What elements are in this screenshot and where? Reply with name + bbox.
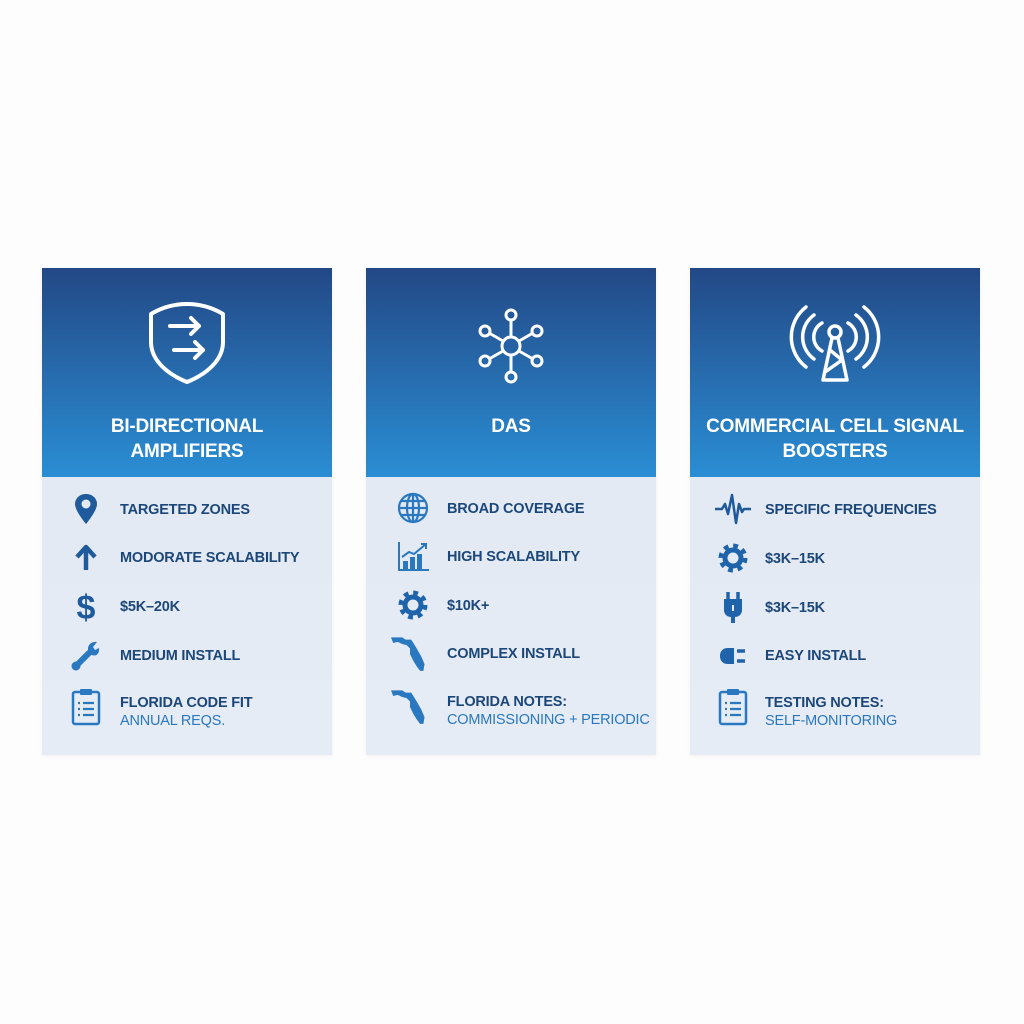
icon: pin xyxy=(75,494,97,524)
row: testing notes: SELF-MONITORING xyxy=(765,713,897,729)
icon: gear xyxy=(718,544,748,572)
row: cost xyxy=(398,590,489,620)
row: high scalability: HIGH SCALABILITY xyxy=(447,549,580,565)
header: DAS xyxy=(366,268,656,477)
row: medium install xyxy=(72,642,240,670)
icon: gear xyxy=(398,590,428,620)
icon: clipboard xyxy=(72,689,100,726)
icon: florida xyxy=(391,637,424,671)
icon: florida xyxy=(391,690,424,724)
row: cost: $10K+ xyxy=(447,598,489,614)
row: cost plug: $3K–15K xyxy=(765,600,825,616)
title xyxy=(706,416,964,462)
row: florida code fit xyxy=(72,689,252,729)
row: moderate scalability: MODORATE SCALABILITY xyxy=(120,550,299,566)
row: florida code fit: ANNUAL REQS. xyxy=(120,713,225,729)
row: targeted zones: TARGETED ZONES xyxy=(120,502,250,518)
card: commercial cell signal boosters xyxy=(690,268,980,755)
row: moderate scalability xyxy=(75,544,300,570)
row: complex install: COMPLEX INSTALL xyxy=(447,646,580,662)
row: easy install xyxy=(720,648,866,664)
row: cost plug xyxy=(724,592,825,623)
icon: up arrow xyxy=(75,544,97,570)
row: cost xyxy=(77,589,180,623)
row: cost gear xyxy=(718,544,825,572)
title xyxy=(111,416,263,462)
row: testing notes: TESTING NOTES: xyxy=(765,695,884,711)
row: broad coverage xyxy=(398,492,584,524)
title: BI-DIRECTIONAL xyxy=(111,416,263,437)
row: florida notes: FLORIDA NOTES: xyxy=(447,694,567,710)
icon: growth chart xyxy=(398,542,429,571)
header: boosters xyxy=(690,268,980,477)
row: florida notes xyxy=(391,690,650,728)
row: high scalability xyxy=(398,542,580,571)
icon: network hub xyxy=(478,308,544,384)
row: florida notes: COMMISSIONING + PERIODIC xyxy=(447,712,650,728)
header: bi-directional amplifiers xyxy=(42,268,332,477)
icon: waveform xyxy=(715,494,751,524)
icon: cell tower xyxy=(790,305,880,382)
icon: shield with arrows xyxy=(149,302,225,384)
row: medium install: MEDIUM INSTALL xyxy=(120,648,240,664)
row: florida code fit: FLORIDA CODE FIT xyxy=(120,695,252,711)
row: cost: $5K–20K xyxy=(120,599,180,615)
row: broad coverage: BROAD COVERAGE xyxy=(447,501,584,517)
title: AMPLIFIERS xyxy=(130,441,244,462)
title: DAS xyxy=(491,416,531,437)
icon: globe xyxy=(398,492,428,524)
icon: side plug xyxy=(720,648,745,664)
card: bi-directional amplifiers xyxy=(42,268,332,755)
icon: plug xyxy=(724,592,742,623)
title: BOOSTERS xyxy=(782,441,888,462)
title: COMMERCIAL CELL SIGNAL xyxy=(706,416,964,437)
icon: clipboard xyxy=(718,689,748,726)
row: specific frequencies xyxy=(715,494,937,524)
row: easy install: EASY INSTALL xyxy=(765,648,866,664)
row: cost gear: $3K–15K xyxy=(765,551,825,567)
row: targeted zones xyxy=(75,494,250,524)
icon: wrench xyxy=(72,642,100,670)
row: testing notes xyxy=(718,689,897,729)
card: DAS xyxy=(366,268,656,755)
row: specific frequencies: SPECIFIC FREQUENCIES xyxy=(765,502,937,518)
row: complex install xyxy=(391,637,580,671)
